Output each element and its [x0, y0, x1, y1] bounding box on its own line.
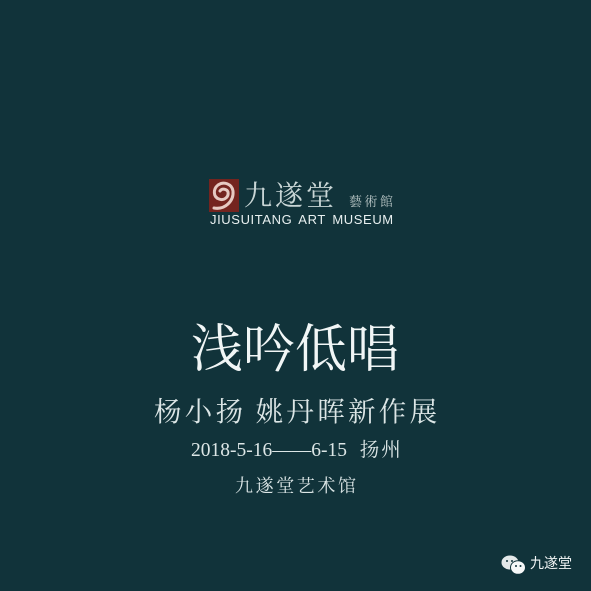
venue: 九遂堂艺术馆 [235, 476, 359, 496]
logo: Jiusuitang Art Museum [209, 174, 396, 227]
account name: 九遂堂 [530, 555, 572, 571]
logo small traditional name: 藝術館 [349, 194, 396, 209]
title: 浅吟低唱 [191, 322, 399, 379]
icon: WeChat bubbles [502, 556, 525, 574]
logo English name: JIUSUITANG ART MUSEUM [210, 212, 394, 227]
icon: red seal with spiral [209, 179, 239, 212]
date and city: 2018-5-16——6-15 扬州 [191, 440, 403, 461]
watermark: WeChat account [502, 555, 572, 574]
subtitle: artists and exhibition: 杨小扬 姚丹晖新作展 [154, 396, 440, 427]
logo calligraphy name: 九遂堂 [244, 174, 337, 214]
